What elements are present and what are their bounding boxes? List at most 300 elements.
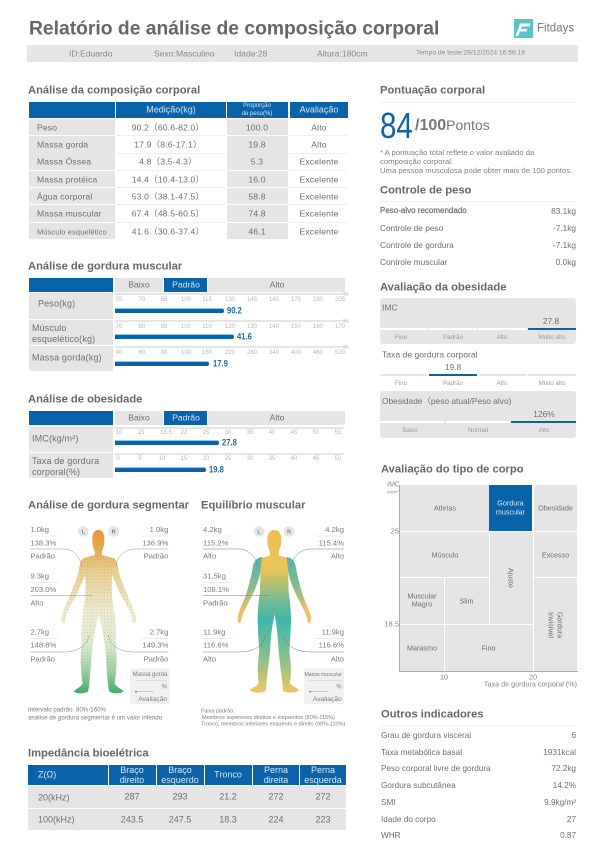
right arm labels: Alto bbox=[331, 552, 344, 561]
row: Músculo esquelético bar: 70 bbox=[116, 324, 122, 330]
row: Músculo esquelético: 46.1 bbox=[248, 226, 266, 236]
row: Taxa de gordura bar: 25 bbox=[225, 456, 231, 462]
row: IMC bar: 55 bbox=[335, 430, 341, 436]
row: 100 kHz: 247.5 bbox=[169, 814, 191, 824]
axis labels: 20 bbox=[529, 672, 537, 681]
row: IMC bar: 50 bbox=[313, 430, 319, 436]
row: 100 kHz: 18.3 bbox=[219, 814, 237, 824]
row: Massa gorda bar: 40 bbox=[116, 350, 122, 356]
cell: Muscular Magro: Muscular bbox=[407, 591, 437, 600]
cell: Marasmo: Marasmo bbox=[407, 643, 437, 652]
panel: body fat gauge: Padrão bbox=[443, 380, 463, 387]
row: Massa gorda bar: 400 bbox=[291, 350, 301, 356]
row: Peso bar: 205 bbox=[335, 297, 345, 303]
row: Músculo esquelético bar: 140 bbox=[269, 324, 279, 330]
row: Massa gorda bar: 460 bbox=[313, 350, 323, 356]
row: Massa gorda bar: 60 bbox=[139, 350, 145, 356]
row: Peso: 100.0 bbox=[246, 122, 268, 132]
panel: obesity chart bbox=[29, 411, 345, 478]
table header: Perna bbox=[311, 765, 335, 775]
row: Massa muscular: 74.8 bbox=[248, 209, 266, 219]
legend: Baixo Padrão Alto: Padrão bbox=[172, 280, 200, 290]
row: IMC bar: 22 bbox=[181, 430, 187, 436]
legend: Baixo Padrão Alto: Alto bbox=[270, 413, 284, 423]
footnote: Faixa padrão: bbox=[201, 709, 235, 715]
panel: other indicators list: 27 bbox=[567, 815, 576, 824]
row: Água corporal bbox=[29, 188, 348, 205]
row: Taxa de gordura bar: 19.8 bbox=[209, 464, 224, 475]
L marker bbox=[78, 526, 89, 537]
panel: weight control list: -7.1kg bbox=[553, 240, 576, 250]
row: Músculo esquelético bar: 100 bbox=[181, 324, 191, 330]
row: Peso bar: 85 bbox=[161, 297, 167, 303]
legend: Baixo Padrão Alto: Baixo bbox=[128, 413, 150, 423]
row: Músculo esquelético bar: esquelético(kg) bbox=[32, 334, 95, 344]
row: IMC bar bbox=[29, 427, 344, 452]
leader lines bbox=[30, 536, 168, 652]
left leg labels: 11.9kg bbox=[203, 627, 225, 636]
table header: Z(Ω) bbox=[38, 770, 56, 780]
left leg labels bbox=[203, 627, 229, 664]
left arm labels: 4.2kg bbox=[203, 525, 222, 534]
row: Massa gorda: Alto bbox=[311, 140, 327, 150]
right leg labels: 116.6% bbox=[319, 641, 344, 650]
row: 20 kHz: 272 bbox=[268, 792, 284, 802]
panel: weight control list: 0.0kg bbox=[556, 257, 576, 267]
panel: obesity gauge: Normal bbox=[468, 427, 488, 434]
cell: Obesidade: Obesidade bbox=[538, 503, 573, 512]
row: Peso: Alto bbox=[311, 122, 327, 132]
body silhouette bbox=[238, 530, 311, 693]
row: Massa gorda bar: 520 bbox=[335, 350, 345, 356]
row: Massa muscular bbox=[29, 205, 348, 223]
panel: impedance table bbox=[28, 765, 346, 830]
row: Taxa de gordura bar: 40 bbox=[291, 456, 297, 462]
panel: obesity gauge: Alto bbox=[539, 427, 549, 434]
row: Taxa de gordura bar: 20 bbox=[203, 456, 209, 462]
panel: IMC gauge: Fino bbox=[395, 334, 407, 341]
R marker bbox=[284, 526, 294, 537]
row: Água corporal: 53.0（38.1-47.5） bbox=[132, 192, 204, 202]
row: 100 kHz: 224 bbox=[268, 814, 284, 824]
score number: 84 bbox=[380, 105, 413, 146]
score note: Uma pessoa musculosa pode obter mais de 100 pontos. bbox=[380, 166, 572, 174]
legend: Baixo Padrão Alto: Alto bbox=[270, 280, 284, 290]
legend box: % bbox=[336, 685, 342, 691]
cell: Marasmo bbox=[400, 624, 444, 671]
heading: obesity assessment: Avaliação da obesidade bbox=[380, 281, 506, 293]
table header bbox=[29, 102, 348, 118]
trunk labels bbox=[30, 572, 56, 607]
panel: obesity gauge: 126% bbox=[533, 409, 555, 419]
R marker bbox=[108, 526, 119, 537]
body silhouette bbox=[61, 530, 136, 693]
panel: other indicators list: 9.9kg/m² bbox=[544, 798, 576, 807]
row: Peso bar: 175 bbox=[291, 297, 301, 303]
row: IMC bar: IMC(kg/m²) bbox=[32, 434, 78, 444]
panel: other indicators list: 72.2kg bbox=[551, 764, 576, 773]
cell: Muscular Magro: Magro bbox=[412, 600, 432, 608]
icon: Fitdays logo bbox=[514, 19, 533, 38]
row: 20 kHz: 20(kHz) bbox=[38, 792, 70, 802]
footnote: análise de gordura segmentar é um valor inferido bbox=[28, 714, 163, 721]
table header: direita bbox=[264, 775, 288, 785]
row: Massa Óssea: 4.8（3.5-4.3） bbox=[139, 157, 197, 167]
row: Músculo esquelético: Músculo esquelético bbox=[37, 227, 107, 236]
row: Massa protéica: Excelente bbox=[299, 174, 339, 184]
row: Músculo esquelético bar: 80 bbox=[139, 324, 145, 330]
row: Peso: 90.2（60.6-82.0） bbox=[132, 122, 204, 132]
row: Peso bar: 190 bbox=[313, 297, 323, 303]
left leg labels bbox=[30, 627, 56, 664]
heading: weight control: Controle de peso bbox=[380, 184, 471, 196]
row: 20 kHz: 287 bbox=[124, 792, 140, 802]
row: Peso bar: 130 bbox=[225, 297, 235, 303]
row: Massa gorda bar: % bbox=[343, 345, 349, 351]
row: Peso bar: 160 bbox=[269, 297, 279, 303]
table header: de peso(%) bbox=[242, 111, 272, 117]
row: Taxa de gordura bar: 35 bbox=[269, 456, 275, 462]
panel: body composition table bbox=[29, 102, 348, 239]
user info bar: Altura:180cm bbox=[317, 49, 368, 59]
legend box bbox=[130, 668, 170, 704]
panel: body fat gauge: Fino bbox=[395, 380, 407, 387]
row: Massa protéica bbox=[29, 171, 348, 188]
heading: segmental fat: Análise de gordura segmentar bbox=[28, 499, 189, 511]
footnote: Membros superiores direitos e esquerdos (80%-115%) bbox=[202, 715, 335, 721]
heading: muscle balance: Equilíbrio muscular bbox=[201, 499, 305, 511]
panel: body type matrix bbox=[384, 482, 578, 688]
axis labels: Taxa de gordura corporal (%) bbox=[484, 679, 577, 688]
row: IMC bar: 27.8 bbox=[222, 437, 237, 448]
panel: other indicators list: 14.2% bbox=[553, 781, 576, 790]
left leg labels: Padrão bbox=[30, 655, 55, 664]
row: Massa gorda bar: 80 bbox=[161, 350, 167, 356]
row: Taxa de gordura bar: 0 bbox=[116, 456, 120, 462]
axes bbox=[399, 485, 578, 672]
legend box bbox=[304, 668, 344, 704]
row: Peso: Peso bbox=[37, 122, 57, 132]
row: Massa gorda bar: 160 bbox=[202, 350, 212, 356]
row: Músculo esquelético bar bbox=[29, 318, 349, 345]
axis labels bbox=[384, 482, 577, 688]
row: Músculo esquelético bar: 41.6 bbox=[237, 331, 252, 342]
panel: obesity gauge: Baixo bbox=[402, 427, 418, 434]
axis labels: (kg/m²) bbox=[387, 489, 400, 494]
table header: Braço bbox=[168, 765, 192, 775]
row: 20 kHz: 21.2 bbox=[219, 792, 237, 802]
trunk labels: 9.3kg bbox=[30, 572, 49, 581]
row: Músculo esquelético bar: Músculo bbox=[32, 323, 67, 333]
row: Massa protéica: 16.0 bbox=[248, 174, 266, 184]
row: Massa gorda: 17.9（8.6-17.1） bbox=[134, 140, 202, 150]
row: Massa Óssea: 5.3 bbox=[251, 157, 263, 167]
cell: Excesso: Excesso bbox=[542, 550, 569, 559]
right leg labels: 11.9kg bbox=[322, 627, 344, 636]
title: Relatório de análise de composição corporal bbox=[29, 18, 439, 39]
cell: Músculo: Músculo bbox=[432, 550, 458, 559]
right arm labels bbox=[319, 525, 344, 561]
footnote: Tronco, membros inferiores esquerdo e direito (90%-110%) bbox=[201, 722, 345, 728]
table header: Braço bbox=[120, 765, 144, 775]
score note: composição corporal. bbox=[380, 156, 453, 166]
right arm labels: Padrão bbox=[144, 552, 168, 561]
left arm labels: 138.3% bbox=[30, 538, 56, 547]
cell: Atletas: Atletas bbox=[434, 503, 456, 512]
score unit: /100Pontos bbox=[415, 117, 490, 134]
legend box: Avaliação bbox=[138, 696, 167, 703]
row: Músculo esquelético bar: 150 bbox=[291, 324, 301, 330]
row: 100 kHz bbox=[28, 808, 346, 830]
table header: esquerda bbox=[304, 775, 342, 785]
cell: Músculo bbox=[400, 532, 488, 576]
row: Água corporal: Excelente bbox=[299, 192, 339, 202]
right arm labels: 1.0kg bbox=[150, 525, 168, 534]
cell: Fino: Fino bbox=[482, 643, 495, 652]
heading: body type: Avaliação do tipo de corpo bbox=[381, 463, 524, 475]
panel: body fat gauge: Alto bbox=[497, 380, 507, 387]
row: IMC bar: 45 bbox=[291, 430, 297, 436]
right leg labels: 149.3% bbox=[142, 641, 169, 650]
row: Massa gorda bar: 17.9 bbox=[213, 358, 228, 369]
table header bbox=[28, 765, 346, 785]
panel: weight control list: 83.1kg bbox=[551, 206, 576, 216]
row: IMC bar: 25 bbox=[203, 430, 209, 436]
row: Taxa de gordura bar bbox=[29, 453, 344, 478]
row: Taxa de gordura bar: 15 bbox=[181, 456, 187, 462]
row: Músculo esquelético bar: % bbox=[343, 319, 349, 325]
row: 20 kHz bbox=[28, 786, 346, 808]
row: Músculo esquelético: Excelente bbox=[299, 226, 339, 236]
panel: other indicators list: 6 bbox=[571, 731, 576, 740]
row: Massa protéica: Massa protéica bbox=[37, 174, 97, 184]
left arm labels: Alto bbox=[203, 552, 216, 561]
row: 100 kHz: 223 bbox=[315, 814, 331, 824]
row: Massa gorda: Massa gorda bbox=[37, 140, 88, 150]
cell: Muscular Magro bbox=[400, 578, 444, 624]
user info bar: Idade:28 bbox=[234, 49, 267, 59]
left leg labels: Alto bbox=[203, 655, 216, 664]
left arm labels: 115.2% bbox=[203, 538, 229, 547]
panel: obesity gauge bbox=[380, 391, 576, 438]
panel: other indicators list: Peso corporal livre de gordura bbox=[381, 764, 491, 773]
row: Massa gorda bar: 220 bbox=[225, 350, 235, 356]
right arm labels bbox=[142, 525, 169, 561]
panel: weight control list: Controle de peso bbox=[380, 223, 443, 233]
row: Peso bbox=[29, 119, 348, 136]
legend: Baixo Padrão Alto: Padrão bbox=[172, 413, 200, 423]
row: Massa muscular: 67.4（48.5-60.5） bbox=[132, 209, 204, 219]
brand name: Fitdays bbox=[537, 22, 574, 34]
row: Peso bar: % bbox=[343, 292, 349, 298]
L marker: L bbox=[82, 529, 86, 535]
cell: Gordura muscular: Gordura bbox=[497, 498, 524, 508]
row: Massa muscular: Excelente bbox=[299, 209, 339, 219]
row: Massa Óssea bbox=[29, 153, 348, 171]
cell: Gordura muscular bbox=[489, 485, 532, 530]
panel: segmental fat body figure bbox=[28, 525, 170, 721]
left arm labels: Padrão bbox=[30, 552, 55, 561]
row: Peso bar: 145 bbox=[247, 297, 257, 303]
table header: Perna bbox=[264, 765, 288, 775]
row: Músculo esquelético bar: 90 bbox=[161, 324, 167, 330]
legend box: Massa muscular bbox=[304, 672, 342, 678]
left leg labels: 148.8% bbox=[30, 641, 56, 650]
trunk labels: Alto bbox=[30, 598, 44, 607]
L marker bbox=[254, 526, 264, 537]
row: Peso bar: 115 bbox=[202, 297, 212, 303]
row: Taxa de gordura bar: 10 bbox=[159, 456, 165, 462]
user info bar: ID:Eduardo bbox=[69, 49, 112, 59]
row: 20 kHz: 272 bbox=[315, 792, 331, 802]
right leg labels: 2.7kg bbox=[150, 627, 168, 636]
panel: other indicators list bbox=[381, 725, 576, 840]
row: Peso bar: 90.2 bbox=[227, 305, 242, 316]
row: IMC bar: 30 bbox=[225, 430, 231, 436]
trunk labels: Padrão bbox=[203, 598, 228, 607]
cell: Excesso bbox=[534, 532, 577, 576]
panel: body fat gauge: Muito alto bbox=[539, 380, 565, 387]
row: Taxa de gordura bar: corporal(%) bbox=[32, 466, 80, 476]
cell: Ajuste: Ajuste bbox=[507, 568, 516, 587]
user info bar bbox=[27, 45, 578, 62]
table header: Avaliação bbox=[300, 104, 338, 114]
cell: Ajuste bbox=[490, 532, 532, 624]
trunk labels bbox=[203, 572, 229, 607]
panel: muscle fat chart bbox=[29, 278, 349, 371]
legend: Baixo Padrão Alto bbox=[29, 278, 345, 292]
panel: obesity gauge: Obesidade（peso atual/Peso alvo) bbox=[382, 396, 511, 406]
panel: weight control list bbox=[380, 201, 576, 267]
row: Músculo esquelético bar: 120 bbox=[225, 324, 235, 330]
panel: IMC gauge: Muito alto bbox=[539, 334, 565, 341]
table header: esquerdo bbox=[161, 775, 199, 785]
score note bbox=[380, 148, 572, 174]
panel: weight control list: Peso-alvo recomendado bbox=[380, 206, 467, 215]
R marker: R bbox=[112, 529, 116, 535]
heading: bioelectrical impedance: Impedância bioelétrica bbox=[28, 747, 149, 759]
leader lines bbox=[203, 536, 344, 652]
panel: other indicators list: Taxa metabólica basal bbox=[381, 748, 462, 757]
right leg labels: Alto bbox=[331, 655, 344, 664]
panel: muscle balance body figure bbox=[201, 525, 345, 728]
right arm labels: 115.4% bbox=[319, 538, 344, 547]
axis labels: IMC bbox=[387, 482, 400, 488]
row: IMC bar: 35 bbox=[247, 430, 253, 436]
row: Taxa de gordura bar: 45 bbox=[313, 456, 319, 462]
heading: obesity analysis: Análise de obesidade bbox=[28, 393, 142, 405]
panel: other indicators list: Gordura subcutânea bbox=[381, 781, 456, 790]
row: Massa gorda bbox=[29, 136, 348, 154]
row: IMC bar: 10 bbox=[116, 430, 122, 436]
score note: * A pontuação total reflete o valor avaliado da bbox=[380, 148, 534, 156]
row: Músculo esquelético bbox=[29, 223, 339, 239]
footnote bbox=[201, 709, 345, 728]
panel: IMC gauge bbox=[380, 298, 576, 344]
table header: Proporção bbox=[243, 103, 271, 109]
trunk labels: 31.5kg bbox=[203, 572, 226, 581]
left arm labels bbox=[30, 525, 56, 561]
table header: Tronco bbox=[214, 770, 242, 780]
row: Peso bar bbox=[29, 292, 349, 319]
panel: body fat gauge bbox=[380, 350, 576, 387]
row: Músculo esquelético bar: 130 bbox=[247, 324, 257, 330]
row: IMC bar: 18.5 bbox=[160, 430, 172, 436]
legend box: % bbox=[162, 685, 168, 691]
legend box: Massa gorda bbox=[133, 672, 168, 678]
trunk labels: 203.0% bbox=[30, 585, 56, 594]
row: Taxa de gordura bar: Taxa de gordura bbox=[32, 456, 99, 466]
row: Músculo esquelético bar: 110 bbox=[202, 324, 212, 330]
heading: body score: Pontuação corporal bbox=[380, 84, 485, 96]
panel: weight control list: Controle de gordura bbox=[380, 240, 454, 250]
row: Peso bar: 100 bbox=[181, 297, 191, 303]
right leg labels bbox=[319, 627, 344, 664]
right arm labels: 4.2kg bbox=[325, 525, 344, 534]
right leg labels: Padrão bbox=[144, 655, 168, 664]
heading: body composition: Análise da composição corporal bbox=[28, 84, 200, 96]
row: IMC bar: 15 bbox=[138, 430, 144, 436]
panel: other indicators list: 0.87 bbox=[560, 831, 576, 840]
table header: Medição(kg) bbox=[146, 104, 196, 114]
cell: Gordura Invisível: Invisível bbox=[547, 612, 556, 637]
right arm labels: 136.9% bbox=[142, 538, 169, 547]
panel: IMC gauge: 27.8 bbox=[543, 316, 559, 326]
axis labels: 18.5 bbox=[384, 619, 399, 628]
cell: Slim bbox=[444, 578, 488, 624]
row: Massa gorda bar bbox=[29, 344, 349, 371]
cell: Gordura muscular: muscular bbox=[496, 507, 525, 516]
panel: IMC gauge: IMC bbox=[382, 303, 398, 313]
panel: other indicators list: Idade do corpo bbox=[381, 815, 436, 824]
row: Peso bar: 70 bbox=[139, 297, 145, 303]
cell: Gordura Invisível: Gordura bbox=[556, 611, 564, 638]
left leg labels: 116.6% bbox=[203, 641, 229, 650]
row: Músculo esquelético: 41.6（30.6-37.4） bbox=[132, 226, 204, 236]
cell: Obesidade bbox=[534, 485, 577, 530]
row: Massa gorda bar: 280 bbox=[247, 350, 257, 356]
R marker: R bbox=[287, 529, 291, 535]
legend: Baixo Padrão Alto bbox=[29, 411, 345, 425]
axis labels: 10 bbox=[440, 672, 448, 681]
panel: other indicators list: SMI bbox=[381, 798, 396, 807]
panel: body fat gauge: 19.8 bbox=[445, 362, 461, 372]
panel: other indicators list: WHR bbox=[381, 831, 401, 840]
row: Massa muscular: Massa muscular bbox=[37, 209, 102, 219]
cell: Atletas bbox=[400, 485, 488, 530]
row: Músculo esquelético bar: 160 bbox=[313, 324, 323, 330]
legend box: Avaliação bbox=[313, 696, 342, 703]
user info bar: Tempo de teste:29/12/2024 16:56:19 bbox=[416, 50, 525, 57]
row: Peso bar: Peso(kg) bbox=[38, 298, 75, 308]
panel: IMC gauge: Alto bbox=[497, 334, 507, 341]
row: Massa gorda bar: 100 bbox=[181, 350, 191, 356]
row: Água corporal: 58.8 bbox=[248, 192, 266, 202]
left arm labels bbox=[203, 525, 229, 561]
panel: other indicators list: Grau de gordura visceral bbox=[381, 731, 471, 740]
row: Músculo esquelético bar: 170 bbox=[335, 324, 345, 330]
row: Massa gorda bar: 340 bbox=[269, 350, 279, 356]
table header: direito bbox=[120, 775, 144, 785]
row: Massa Óssea: Massa Óssea bbox=[37, 157, 91, 167]
row: Taxa de gordura bar: 30 bbox=[247, 456, 253, 462]
user info bar: Sexo:Masculino bbox=[154, 49, 215, 59]
row: IMC bar: 40 bbox=[269, 430, 275, 436]
left arm labels: 1.0kg bbox=[30, 525, 49, 534]
panel: body fat gauge: Taxa de gordura corporal bbox=[382, 350, 478, 360]
row: Taxa de gordura bar: 5 bbox=[138, 456, 142, 462]
row: Massa Óssea: Excelente bbox=[299, 157, 339, 167]
